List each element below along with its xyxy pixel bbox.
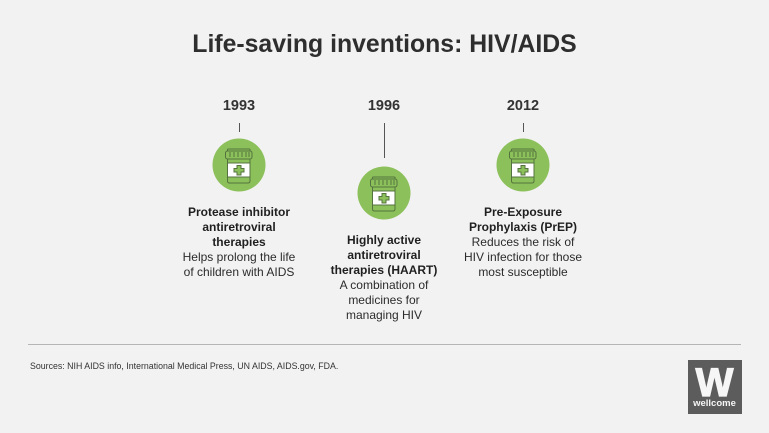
logo word: wellcome	[693, 398, 736, 408]
timeline column: 1993	[183, 98, 295, 279]
connector line 2012	[523, 123, 524, 132]
year: 1996: 1996	[368, 98, 400, 114]
text: protease inhibitor: therapies	[212, 235, 266, 249]
connector line 1993	[239, 123, 240, 132]
text: HAART: therapies (HAART)	[331, 263, 437, 277]
connector line 1996	[384, 123, 385, 158]
year: 2012: 2012	[507, 98, 539, 114]
sources note: Sources: NIH AIDS info, International Medical Press, UN AIDS, AIDS.gov, FDA.	[30, 361, 338, 371]
text: protease inhibitor	[183, 205, 295, 279]
timeline column: 2012	[464, 98, 582, 279]
year: 1993: 1993	[223, 98, 255, 114]
icon: medicine jar 1996	[358, 166, 410, 220]
text: PrEP: HIV infection for those	[464, 250, 582, 264]
text: HAART: managing HIV	[346, 308, 422, 322]
icon: medicine jar 1993	[212, 138, 266, 192]
text: PrEP: most susceptible	[478, 265, 568, 279]
text: HAART: A combination of	[340, 278, 428, 292]
text: protease inhibitor: of children with AIDS	[184, 265, 294, 279]
text: HAART	[330, 233, 437, 322]
logo: wellcome	[688, 360, 742, 414]
logo letter: W	[696, 360, 733, 404]
text: PrEP	[464, 205, 582, 279]
text: PrEP: Prophylaxis (PrEP)	[469, 220, 577, 234]
text: HAART: Highly active	[347, 233, 421, 247]
text: PrEP: Pre-Exposure	[484, 205, 562, 219]
text: protease inhibitor: antiretroviral	[202, 220, 276, 234]
text: HAART: antiretroviral	[347, 248, 421, 262]
timeline column: 1996	[330, 98, 437, 322]
title: Life-saving inventions: HIV/AIDS	[192, 31, 577, 58]
text: protease inhibitor: Protease inhibitor	[188, 205, 290, 219]
icon: medicine jar 2012	[496, 138, 550, 192]
text: protease inhibitor: Helps prolong the life	[183, 250, 295, 264]
text: PrEP: Reduces the risk of	[472, 235, 574, 249]
text: HAART: medicines for	[348, 293, 420, 307]
